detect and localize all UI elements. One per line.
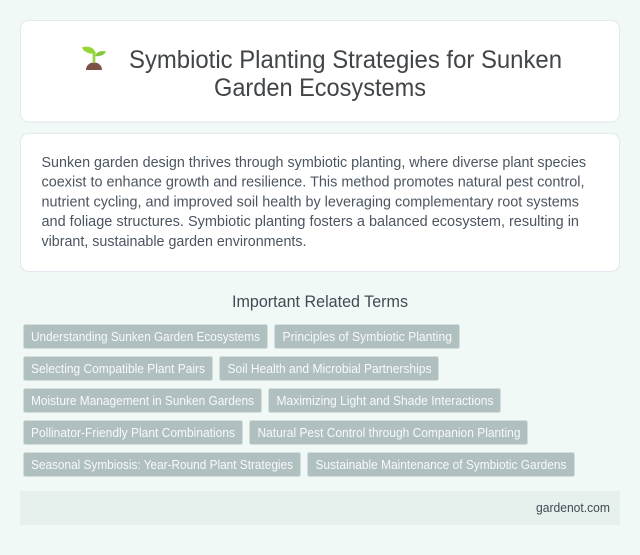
tag: Pollinator-Friendly Plant Combinations [31, 426, 235, 440]
tag [24, 388, 262, 412]
tag [220, 356, 438, 380]
tag group: related terms [24, 324, 574, 476]
tag: Selecting Compatible Plant Pairs [31, 362, 205, 376]
footer: gardenot.com [536, 501, 610, 515]
tag: Moisture Management in Sunken Gardens [31, 394, 254, 408]
panel: description: nutrient cycling, and improved soil health by leveraging complementary root systems [42, 194, 579, 210]
tag: Maximizing Light and Shade Interactions [276, 394, 494, 408]
panel: title card [20, 20, 620, 122]
tag: Sustainable Maintenance of Symbiotic Gardens [316, 458, 566, 472]
title: Symbiotic Planting Strategies for Sunken [129, 46, 562, 74]
tag [24, 324, 268, 348]
panel: description: vibrant, sustainable garden environments. [42, 233, 306, 250]
tag: Seasonal Symbiosis: Year-Round Plant Strategies [31, 458, 293, 472]
tag [250, 420, 528, 444]
tag [268, 388, 500, 412]
title: Garden Ecosystems [214, 74, 426, 102]
title [129, 46, 562, 102]
icon: seedling [82, 47, 106, 70]
tag [24, 356, 212, 380]
tag [24, 452, 300, 476]
tag: Soil Health and Microbial Partnerships [228, 362, 432, 376]
tag [308, 452, 574, 476]
tag [24, 420, 242, 444]
heading: related terms: Important Related Terms [232, 293, 408, 311]
panel: description [20, 134, 620, 272]
panel: description: Sunken garden design thrives through symbiotic planting, where diverse plant species [42, 154, 586, 171]
tag: Understanding Sunken Garden Ecosystems [31, 330, 260, 344]
footer [20, 491, 620, 525]
tag: Principles of Symbiotic Planting [282, 330, 452, 344]
panel: description: and foliage structures. Symbiotic planting fosters a balanced ecosystem, resulting in [42, 213, 579, 230]
tag: Natural Pest Control through Companion Planting [258, 426, 520, 440]
panel: description: coexist to enhance growth and resilience. This method promotes natural pest control, [42, 174, 584, 190]
tag [274, 324, 460, 348]
